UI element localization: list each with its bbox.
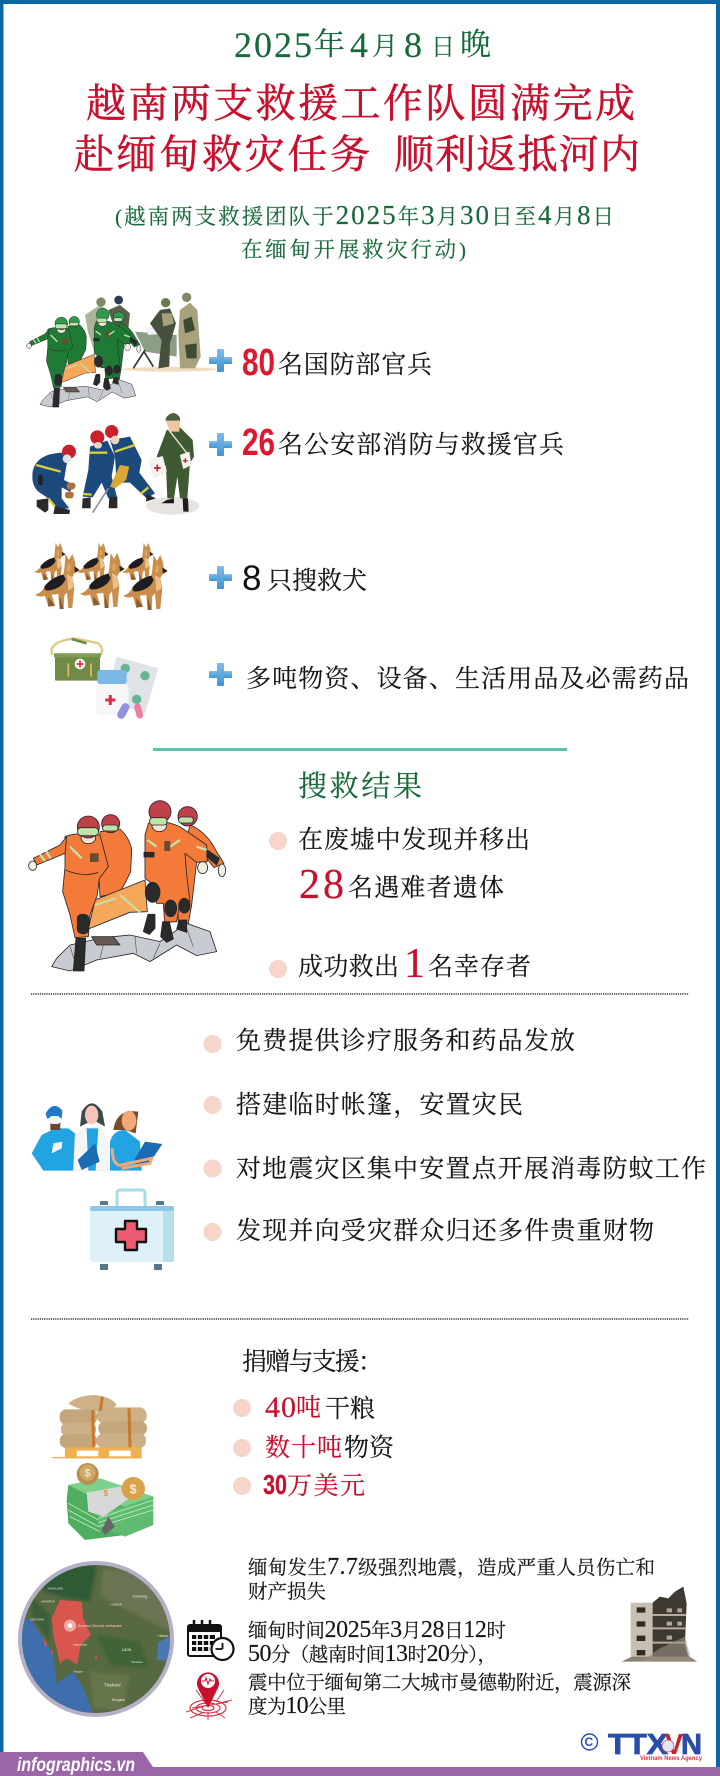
service: return of valuables: 发现并向受灾群众归还多件贵重财物 <box>236 1217 654 1245</box>
plus icon <box>209 566 232 589</box>
earthquake text: 财产损失 <box>248 1581 326 1603</box>
date heading: 年 <box>314 27 345 62</box>
earthquake text <box>248 1554 655 1719</box>
date heading: 8 <box>404 25 422 65</box>
map: Myanmar earthquake zone: YUNNAN <box>110 1603 122 1607</box>
illustration: orange rescuers with stretcher <box>29 801 226 971</box>
map: Myanmar earthquake zone: Myanmar (Burma) earthquake <box>77 1624 122 1628</box>
earthquake text: 震中位于缅甸第二大城市曼德勒附近，震源深 <box>248 1672 631 1694</box>
stat: 80 national defence personnel: 80 <box>242 342 275 384</box>
illustration: firefighters with jackhammer and medic <box>32 413 199 515</box>
map: Myanmar earthquake zone: Naypyidaw <box>73 1643 88 1647</box>
illustration: medical bag, pills and blister pack <box>51 639 158 720</box>
logo: TTXVN: TTX <box>608 1729 669 1761</box>
map: Myanmar earthquake zone <box>13 1558 180 1718</box>
illustration: money stack and coins: $ <box>130 1482 137 1496</box>
date heading: 晚 <box>460 27 491 62</box>
donation: 40 tons dry food: 吨 <box>296 1394 321 1422</box>
title: 赴缅甸救灾任务 <box>74 132 370 177</box>
subtitle: (越南两支救援团队于2025年3月30日至4月8日 <box>115 200 614 230</box>
stat: 8 rescue dogs: 8 <box>242 559 261 598</box>
result: 1 survivor rescued: 1 <box>404 941 425 987</box>
illustration: money stack and coins <box>67 1463 153 1540</box>
result: 28 victims recovered: 28 <box>299 862 344 908</box>
illustration: first aid kit <box>90 1190 174 1270</box>
result: 1 survivor rescued: 成功救出 <box>298 953 399 981</box>
earthquake text: 50分（越南时间13时20分）， <box>248 1641 497 1667</box>
map: Myanmar earthquake zone: MIZORAM <box>31 1618 45 1622</box>
illustration: collapsed building <box>622 1587 697 1662</box>
date heading <box>234 25 491 65</box>
map: Myanmar earthquake zone: NAGALAND <box>48 1586 63 1590</box>
illustration: money stack and coins: $ <box>85 1468 91 1480</box>
illustration: search and rescue dogs <box>34 543 168 610</box>
logo: TTXVN: V <box>665 1729 684 1761</box>
map: Myanmar earthquake zone: Vientiane <box>131 1660 143 1664</box>
stat: 26 public security personnel <box>242 422 564 464</box>
result: 28 victims recovered: 在废墟中发现并移出 <box>298 826 530 854</box>
illustration: sacks on pallet <box>52 1395 147 1458</box>
map: Myanmar earthquake zone: Hanoi <box>158 1634 168 1638</box>
stat: 8 rescue dogs: 只搜救犬 <box>267 567 367 595</box>
result: 28 victims recovered: 名遇难者遗体 <box>348 874 504 902</box>
donation: 300,000 US dollars: 30 <box>263 1469 287 1500</box>
service: free medical care: 免费提供诊疗服务和药品发放 <box>236 1027 575 1055</box>
map: Myanmar earthquake zone: Yangon <box>73 1669 83 1673</box>
heading: donations and support: 捐赠与支援： <box>242 1348 383 1376</box>
plus icon <box>209 433 232 456</box>
date heading: 日 <box>431 35 455 61</box>
illustration: soldiers carrying stretcher beside officers at map table <box>27 293 217 407</box>
donation: 300,000 US dollars: 万美元 <box>287 1472 365 1500</box>
map: Myanmar earthquake zone: Thailand <box>104 1682 121 1687</box>
title <box>74 81 640 177</box>
service: temporary tents: 搭建临时帐篷，安置灾民 <box>236 1091 523 1119</box>
section heading: search and rescue results: 搜救结果 <box>298 770 422 803</box>
stat: 8 rescue dogs <box>242 559 367 598</box>
logo: TTXVN: N <box>681 1729 702 1761</box>
donation: tens of tons of goods: 物资 <box>344 1434 395 1462</box>
result: 1 survivor rescued <box>269 941 531 987</box>
date heading: 月 <box>372 32 398 61</box>
donation: 40 tons dry food <box>233 1391 375 1424</box>
logo: TTXVN: C <box>584 1735 594 1749</box>
plus icon <box>209 663 232 686</box>
result: 1 survivor rescued: 名幸存者 <box>428 953 531 981</box>
date heading: 2025 <box>234 25 312 65</box>
donation: 300,000 US dollars <box>233 1469 365 1500</box>
title: 越南两支救援工作队圆满完成 <box>86 81 635 126</box>
donation: 40 tons dry food: 40 <box>265 1391 296 1424</box>
stat: supplies and medicine: 多吨物资、设备、生活用品及必需药品 <box>246 665 689 693</box>
subtitle <box>115 200 614 262</box>
map: Myanmar earthquake zone: Bangkok <box>112 1698 125 1702</box>
icon: epicentre pin <box>186 1672 232 1720</box>
logo: TTXVN: Vietnam News Agency <box>640 1756 703 1762</box>
result: 28 victims recovered <box>269 826 530 908</box>
earthquake text: 缅甸时间2025年3月28日12时 <box>248 1617 506 1643</box>
donation: 40 tons dry food: 干粮 <box>325 1395 375 1423</box>
stat: 80 national defence personnel: 名国防部官兵 <box>278 351 432 379</box>
logo: TTXVN <box>582 1729 703 1762</box>
date heading: 4 <box>350 25 368 65</box>
map: Myanmar earthquake zone: Kunming <box>133 1595 147 1599</box>
earthquake text: 度为10公里 <box>248 1693 346 1719</box>
stat: 80 national defence personnel <box>242 342 432 384</box>
illustration: medical staff <box>32 1103 162 1171</box>
donation: tens of tons of goods: 数十吨 <box>265 1434 342 1462</box>
stat: 26 public security personnel: 26 <box>242 422 275 464</box>
footer band: infographics.vn: infographics.vn <box>17 1755 135 1776</box>
divider <box>153 748 567 751</box>
service: disinfection: 对地震灾区集中安置点开展消毒防蚊工作 <box>236 1155 706 1183</box>
stat: 26 public security personnel: 名公安部消防与救援官兵 <box>278 431 564 459</box>
map: Myanmar earthquake zone: Laos <box>122 1647 131 1652</box>
plus icon <box>209 349 232 372</box>
subtitle: 在缅甸开展救灾行动) <box>241 238 466 262</box>
title: 顺利返抵河内 <box>394 132 640 177</box>
icon: calendar and clock <box>188 1620 234 1660</box>
footer band: infographics.vn <box>0 1752 720 1776</box>
illustration: money stack and coins: $ <box>104 1489 109 1498</box>
donation: tens of tons of goods <box>233 1434 395 1462</box>
map: Myanmar earthquake zone: MANIPUR <box>42 1600 55 1604</box>
earthquake text: 缅甸发生7.7级强烈地震，造成严重人员伤亡和 <box>248 1554 655 1580</box>
